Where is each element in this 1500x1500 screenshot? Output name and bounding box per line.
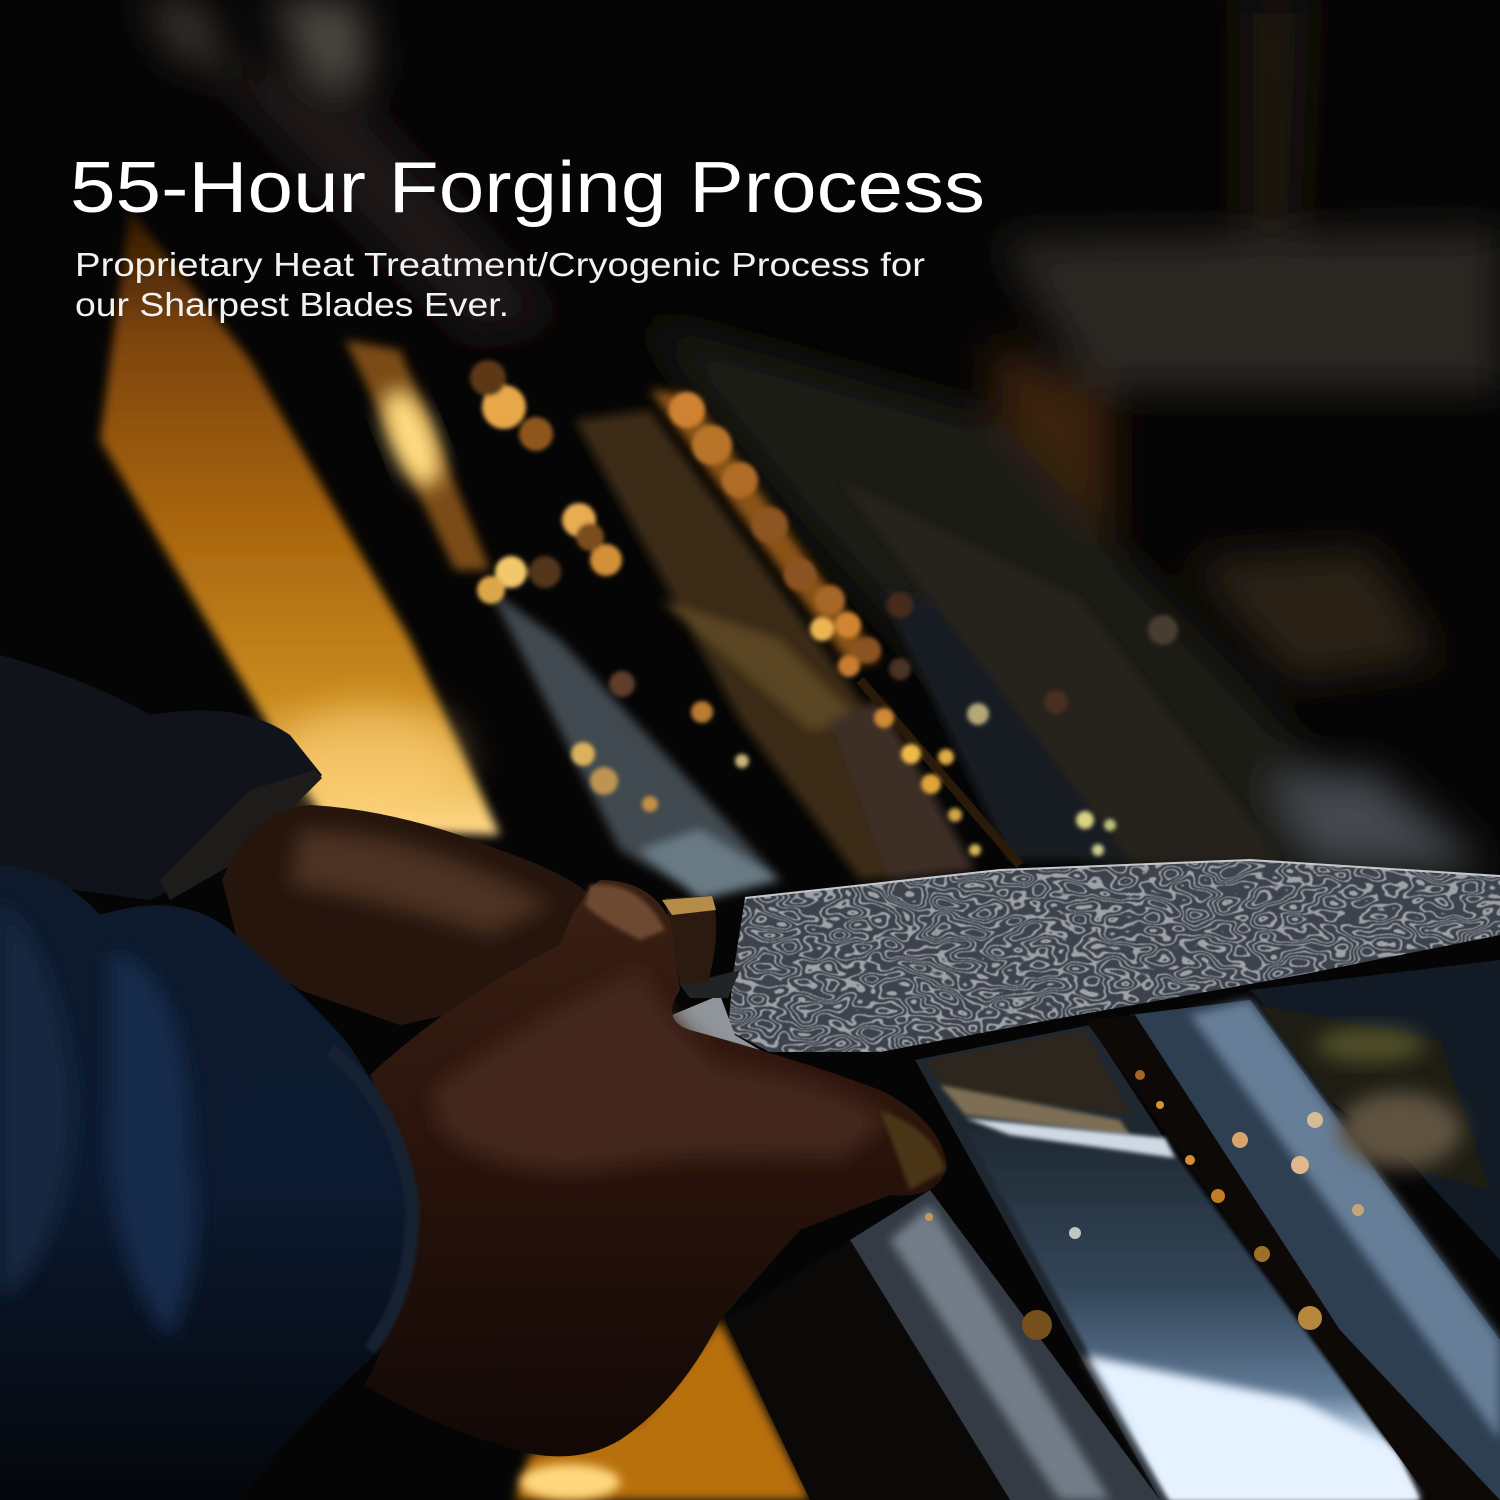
blue front sleeve [0,865,412,1500]
forge light streaks and hot spot [372,382,1020,865]
subtitle: Proprietary Heat Treatment/Cryogenic Process for [75,246,925,283]
upper sleeve [0,655,322,900]
sparks on foreground rails [925,1070,1364,1340]
blurred workshop background [140,0,1500,880]
subtitle [75,246,925,323]
knife handle with brass pin [662,896,716,985]
foreground steel rails [725,960,1500,1500]
title: 55-Hour Forging Process [70,148,985,228]
back hand [222,805,590,1025]
text block: heading and subheading [70,148,985,323]
blurred metal rails [345,340,1280,900]
thumb and front hand [365,880,947,1456]
bokeh lights [470,360,1178,856]
knife blade with damascus pattern [672,859,1500,1052]
subtitle: our Sharpest Blades Ever. [75,286,509,323]
glowing forge strip [100,210,810,1500]
